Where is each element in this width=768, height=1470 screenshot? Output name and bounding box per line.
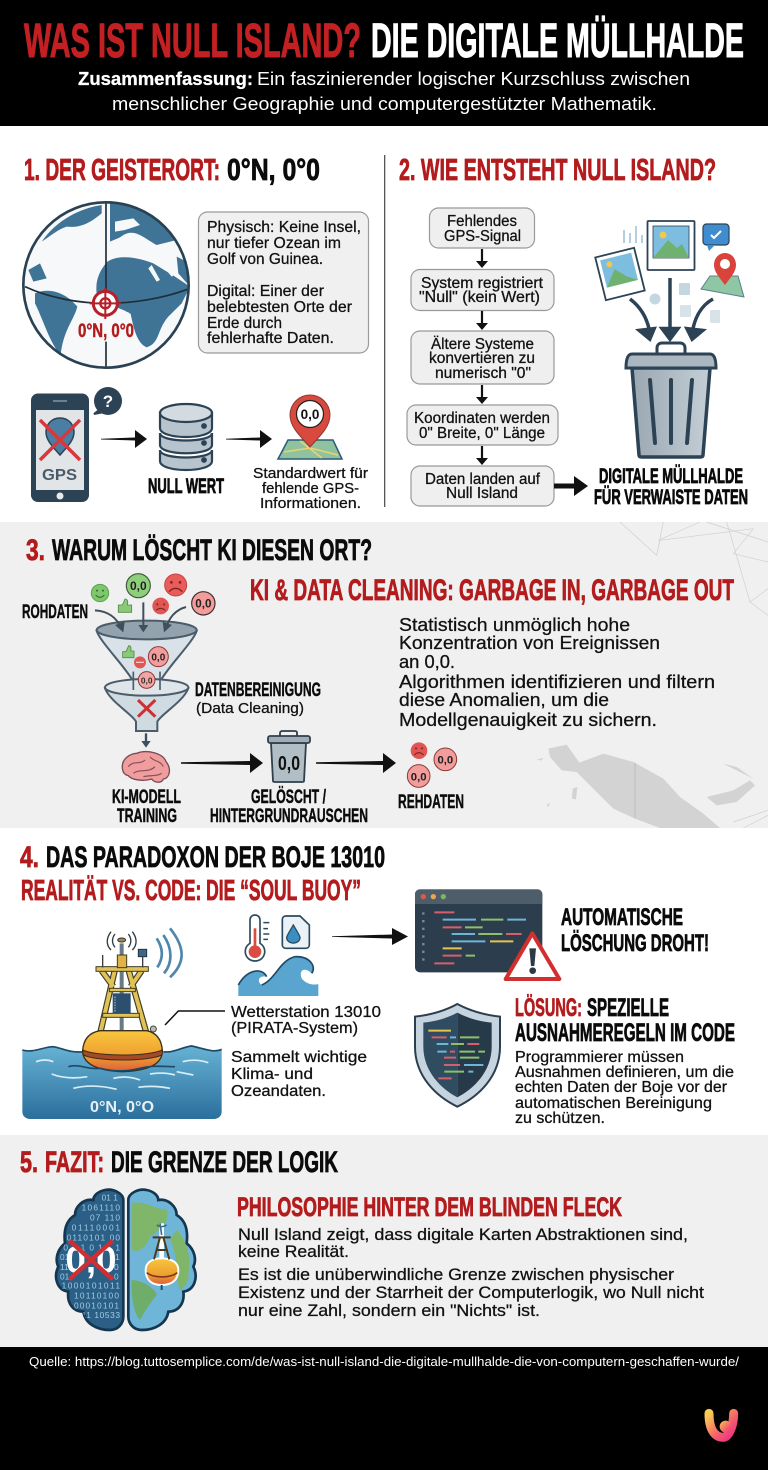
- summary text: [78, 69, 690, 114]
- heading: section 5: [20, 1146, 338, 1179]
- icon: shield with code: [415, 1004, 500, 1107]
- flowchart: [407, 208, 558, 506]
- heading: section 5: FAZIT:: [45, 1146, 104, 1179]
- text: default value note: fehlende GPS-: [262, 480, 359, 497]
- title red part: WAS IST NULL ISLAND?: [24, 14, 361, 68]
- panel: section 5: [0, 1135, 768, 1347]
- callout: physical vs digital: belebtesten Orte der: [207, 299, 353, 316]
- source line: Quelle: https://blog.tuttosemplice.com/de/was-ist-null-island-die-digitale-mullhalde-die-von-computern-geschaffen-wurde/: [29, 1354, 739, 1369]
- icon: split brain: 1061110: [82, 1203, 120, 1213]
- step: older systems convert: numerisch "0": [435, 365, 531, 382]
- arrow: database to pin: [226, 430, 272, 448]
- icon: split brain: 01: [60, 1252, 70, 1262]
- icon: filtering funnel: 0,0: [195, 598, 211, 611]
- icon: split brain: 01: [60, 1271, 70, 1281]
- icon: split brain: 00010101: [74, 1300, 119, 1310]
- text: statistical anomaly: diese Anomalien, um die: [399, 690, 609, 710]
- step: missing signal: [430, 208, 534, 248]
- summary text: menschlicher Geographie und computergestützter Mathematik.: [112, 94, 657, 114]
- illustration: buoy at sea: [22, 928, 225, 1119]
- icon: filtering funnel: 0,0: [130, 579, 147, 593]
- icon: map pin 0,0: [278, 395, 342, 459]
- heading: section 3: 3.: [26, 534, 45, 567]
- icon: filtering funnel: 0,0: [151, 653, 166, 664]
- solution heading: LÖSUNG:: [515, 993, 582, 1022]
- arrow: station to code: [332, 928, 408, 945]
- icon: dropped data: 0,0: [411, 771, 427, 783]
- labels: pipeline: GELÖSCHT /: [251, 787, 326, 808]
- text: statistical anomaly: Algorithmen identifizieren und filtern: [399, 672, 715, 692]
- icon: split brain: 11 10533: [82, 1310, 120, 1320]
- heading: section 5: DIE GRENZE DER LOGIK: [111, 1146, 338, 1179]
- step: older systems convert: Ältere Systeme: [431, 336, 534, 353]
- step: coordinates: [407, 405, 558, 445]
- warning text: [561, 904, 709, 957]
- icon: split brain: 0,0: [66, 1239, 116, 1280]
- solution text: automatischen Bereinigung: [515, 1095, 712, 1112]
- icon: dropped data: [407, 742, 457, 787]
- summary text: Ein faszinierender logischer Kurzschluss zwischen: [257, 69, 690, 89]
- step: older systems convert: [411, 331, 554, 384]
- step: older systems convert: konvertieren zu: [429, 350, 535, 367]
- step: data lands: Daten landen auf: [425, 471, 541, 488]
- heading: section 4: [20, 841, 385, 874]
- heading: section 3: WARUM LÖSCHT KI DIESEN ORT?: [52, 534, 372, 567]
- heading: section 3: [26, 534, 372, 567]
- icon: split brain: 0: [114, 1262, 119, 1272]
- icon: filtering funnel: [91, 574, 215, 748]
- icon: split brain: 11: [60, 1262, 69, 1272]
- icon: split brain: 0 1 1 0 1 1 1: [63, 1243, 120, 1253]
- heading: section 4: DAS PARADOXON DER BOJE 13010: [46, 841, 385, 874]
- icon: code window with warning: [415, 889, 559, 979]
- step: coordinates: Koordinaten werden: [414, 410, 550, 427]
- arrows: data into trash: [630, 278, 713, 340]
- solution text: Ausnahmen definieren, um die: [515, 1064, 734, 1081]
- arrow: phone to database: [101, 430, 147, 448]
- solution heading: SPEZIELLE: [587, 994, 669, 1022]
- heading: section 4: 4.: [20, 841, 39, 874]
- labels: pipeline: KI-MODELL: [112, 787, 181, 808]
- text: statistical anomaly: Modellgenauigkeit zu sichern.: [399, 710, 657, 730]
- label: globe coordinates: 0°N, 0°0: [78, 321, 134, 342]
- solution text: zu schützen.: [515, 1110, 605, 1127]
- icon: split brain: 1: [115, 1252, 120, 1262]
- callout: physical vs digital: Erde durch: [207, 315, 282, 332]
- step: missing signal: Fehlendes: [447, 213, 517, 230]
- icon: brain: [122, 752, 169, 782]
- icon: phone without GPS: GPS: [42, 467, 77, 484]
- icon: split brain: 0: [114, 1271, 119, 1281]
- solution heading: [515, 993, 735, 1047]
- text: weather station: [231, 1004, 381, 1100]
- step: system registers null: "Null" (kein Wert): [419, 289, 540, 306]
- heading: section 1: 1. DER GEISTERORT:: [24, 152, 220, 187]
- panel: section 4: [0, 828, 768, 1135]
- icon: split brain: [56, 1190, 196, 1330]
- text: weather station: Sammelt wichtige: [231, 1049, 367, 1066]
- icon: map pin 0,0: 0,0: [301, 407, 319, 422]
- arrow: to trash: [554, 476, 588, 496]
- arrow: bin to dropped data: [316, 753, 396, 773]
- text: conclusion: nur eine Zahl, sondern ein "Nichts" ist.: [238, 1301, 540, 1320]
- icon: split brain: 1000101011: [62, 1281, 120, 1291]
- label: raw data: ROHDATEN: [22, 602, 88, 623]
- text: weather station: Wetterstation 13010: [231, 1004, 381, 1021]
- text: statistical anomaly: an 0,0.: [399, 652, 455, 672]
- labels: pipeline: TRAINING: [117, 806, 177, 827]
- step: data lands: Null Island: [446, 485, 518, 502]
- heading: section 1: 0°N, 0°0: [227, 152, 320, 187]
- heading: section 5: 5.: [20, 1146, 38, 1179]
- icon: floating data: [595, 221, 744, 323]
- icon: phone without GPS: ?: [103, 392, 113, 411]
- text: conclusion: Null Island zeigt, dass digitale Karten Abstraktionen sind,: [238, 1225, 688, 1244]
- label: null value: NULL WERT: [148, 475, 224, 498]
- labels: pipeline: HINTERGRUNDRAUSCHEN: [210, 806, 368, 827]
- callout: physical vs digital: [198, 212, 368, 353]
- step: system registers null: [411, 270, 554, 310]
- text: conclusion: Es ist die unüberwindliche Grenze zwischen physischer: [238, 1265, 674, 1284]
- map silhouette: [537, 745, 755, 828]
- icons: climate data: [238, 915, 318, 996]
- logo: [709, 1413, 734, 1437]
- icon: dropped data: 0,0: [437, 755, 453, 767]
- text: weather station: Ozeandaten.: [231, 1083, 326, 1100]
- text: default value note: Standardwert für: [253, 465, 368, 482]
- text: default value note: Informationen.: [260, 495, 361, 512]
- panel: sections 1 and 2: [0, 126, 768, 522]
- labels: pipeline: [112, 787, 464, 827]
- icon: phone without GPS: [31, 387, 122, 502]
- solution text: echten Daten der Boje vor der: [515, 1079, 727, 1096]
- icon: database: [160, 404, 212, 470]
- text: statistical anomaly: Statistisch unmöglich hohe: [399, 615, 630, 635]
- text: conclusion: [238, 1225, 704, 1320]
- text: statistical anomaly: Konzentration von Ereignissen: [399, 633, 660, 653]
- icon: filtering funnel: 0,0: [141, 675, 153, 685]
- summary text: Zusammenfassung:: [78, 69, 253, 89]
- icon: split brain: 10110100: [74, 1291, 119, 1301]
- callout: physical vs digital: Physisch: Keine Insel,: [207, 219, 361, 236]
- label: data cleaning: [195, 680, 321, 717]
- callout: physical vs digital: fehlerhafte Daten.: [207, 330, 334, 347]
- callout: physical vs digital: Digital: Einer der: [207, 283, 325, 300]
- icon: trash can: [626, 343, 716, 457]
- text: conclusion: keine Realität.: [238, 1242, 349, 1261]
- step: system registers null: System registriert: [421, 275, 544, 292]
- icon: globe: [23, 202, 190, 368]
- label: buoy coordinates: 0°N, 0°O: [90, 1099, 154, 1116]
- icon: split brain: 07 110: [90, 1213, 120, 1223]
- label: data cleaning: (Data Cleaning): [196, 700, 304, 717]
- warning text: AUTOMATISCHE: [561, 904, 683, 931]
- panel: section 3: [0, 522, 768, 828]
- callout: physical vs digital: Golf von Guinea.: [207, 251, 323, 268]
- step: data lands: [411, 466, 554, 506]
- label: digital dump: [594, 463, 748, 509]
- step: missing signal: GPS-Signal: [444, 228, 521, 245]
- solution text: [515, 1049, 734, 1127]
- text: weather station: (PIRATA-System): [231, 1020, 358, 1037]
- header banner: [0, 0, 768, 126]
- labels: pipeline: REHDATEN: [398, 792, 464, 813]
- icon: split brain: 01 1: [102, 1193, 118, 1203]
- footer: [0, 1347, 768, 1470]
- icon: split brain: 0110101 00: [67, 1233, 120, 1243]
- step: coordinates: 0" Breite, 0" Länge: [419, 425, 545, 442]
- text: statistical anomaly: [399, 615, 715, 730]
- callout: physical vs digital: nur tiefer Ozean im: [207, 235, 341, 252]
- text: weather station: Klima- und: [231, 1066, 313, 1083]
- text: default value note: [253, 465, 368, 512]
- label: data cleaning: DATENBEREINIGUNG: [195, 680, 321, 701]
- icon: small trash 0,0: 0,0: [278, 753, 300, 775]
- solution text: Programmierer müssen: [515, 1049, 684, 1066]
- icon: small trash 0,0: [268, 731, 310, 782]
- text: conclusion: Existenz und der Starrheit der Computerlogik, wo Null nicht: [238, 1283, 704, 1302]
- subheading: soul buoy: REALITÄT VS. CODE: DIE “SOUL BUOY”: [21, 874, 361, 907]
- icon: split brain: 01110001: [72, 1223, 120, 1233]
- arrow: brain to bin: [181, 753, 263, 773]
